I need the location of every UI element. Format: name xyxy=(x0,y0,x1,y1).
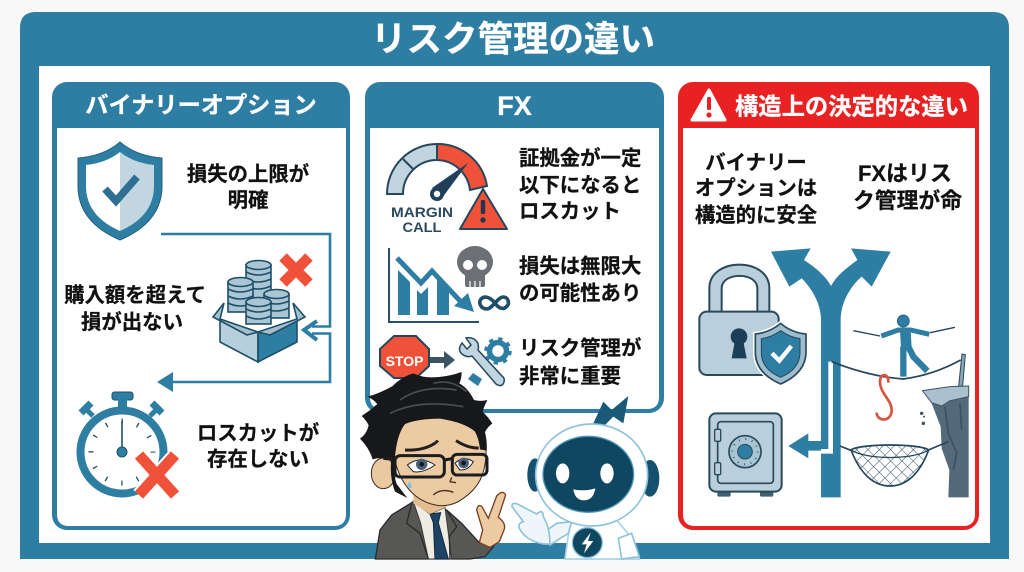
text: risk management important: 非常に重要 xyxy=(519,365,621,388)
text: margin stop-out xyxy=(519,146,641,223)
icon: falling chart xyxy=(389,248,479,322)
icon: stop sign: STOP xyxy=(386,353,423,369)
arrow: shield to box xyxy=(161,234,330,326)
visor xyxy=(543,436,634,512)
icon: cliff xyxy=(920,354,969,497)
panel body xyxy=(370,128,659,409)
text: risk management important xyxy=(519,336,641,388)
content area xyxy=(39,66,990,543)
icon: warning triangle xyxy=(692,90,725,120)
hair highlights xyxy=(390,382,467,413)
face xyxy=(392,415,486,506)
panel: FX xyxy=(365,82,664,413)
arrow: to safe xyxy=(788,433,821,458)
text: no loss above purchase amount xyxy=(64,284,206,334)
coin stack tall xyxy=(246,260,271,310)
panel frame xyxy=(365,82,664,413)
text: no loss above purchase amount: 購入額を超えて xyxy=(64,284,206,307)
icon: tightrope walker xyxy=(853,315,955,377)
panel frame xyxy=(52,82,350,530)
arrow: stop to tools xyxy=(430,351,455,369)
icon: safety net xyxy=(840,442,948,486)
arrow head: to stopwatch xyxy=(157,372,173,392)
text: clear loss limit: 損失の上限が xyxy=(187,162,309,186)
panel heading: 構造上の決定的な違い xyxy=(735,94,968,120)
text: binary is structurally safe: バイナリー xyxy=(705,152,807,174)
text: no loss above purchase amount: 損が出ない xyxy=(81,310,183,334)
illustration: forking paths and icons xyxy=(699,248,969,497)
panel: decisive difference xyxy=(678,82,979,530)
text: clear loss limit: 明確 xyxy=(228,189,268,212)
icon: gear xyxy=(486,339,510,363)
icon: margin call gauge xyxy=(387,144,507,235)
lapels xyxy=(407,503,457,559)
eyebrows xyxy=(405,441,479,450)
text: no stop-out exists: 存在しない xyxy=(207,448,309,471)
arm xyxy=(540,522,572,545)
eyes xyxy=(407,458,473,472)
text: margin stop-out: ロスカット xyxy=(519,201,621,223)
head xyxy=(536,424,648,526)
text: binary is structurally safe: 構造的に安全 xyxy=(695,204,818,227)
text: no stop-out exists: ロスカットが xyxy=(197,421,319,445)
earphones xyxy=(527,458,659,497)
panel body xyxy=(683,128,975,526)
text: FX risk management xyxy=(853,161,962,213)
glasses xyxy=(383,454,487,477)
body xyxy=(565,520,639,559)
icon: hook xyxy=(877,375,892,419)
icon: red cross xyxy=(283,257,309,283)
text: binary is structurally safe xyxy=(695,152,818,227)
panel heading: FX xyxy=(497,91,532,121)
chest badge xyxy=(572,528,602,558)
icon: wrench xyxy=(460,338,504,386)
text: risk management important: リスク管理が xyxy=(519,336,641,360)
text: unlimited loss xyxy=(519,255,641,305)
text: binary is structurally safe: オプションは xyxy=(695,177,817,200)
right arm xyxy=(618,533,639,559)
tightrope xyxy=(832,360,961,379)
panel frame xyxy=(678,82,979,530)
hair xyxy=(360,372,492,460)
nose and mouth xyxy=(433,477,456,495)
shirt xyxy=(413,502,452,559)
text: margin stop-out: 証拠金が一定 xyxy=(519,146,641,170)
icon: padlock xyxy=(699,265,779,375)
panel heading: バイナリーオプション xyxy=(85,92,317,118)
icon: shield with check xyxy=(78,142,162,240)
ear xyxy=(371,458,395,489)
text: FX risk management: FXはリス xyxy=(858,161,952,186)
coin stack front xyxy=(246,298,271,324)
character: robot assistant xyxy=(512,396,659,559)
text: clear loss limit xyxy=(187,162,309,212)
text: FX risk management: ク管理が命 xyxy=(853,188,962,213)
icon: coins in box xyxy=(213,260,305,362)
antenna lightning xyxy=(593,396,628,425)
arrow: forking path xyxy=(771,248,891,497)
neck xyxy=(413,493,457,514)
title: リスク管理の違い xyxy=(371,19,655,59)
icon: margin call gauge: CALL xyxy=(402,219,442,235)
text: unlimited loss: の可能性あり xyxy=(519,282,641,305)
arrow: box to stopwatch xyxy=(168,334,330,382)
icon: infinity xyxy=(480,297,508,309)
coin stack left xyxy=(228,278,253,312)
hand pointing xyxy=(512,503,550,544)
face xyxy=(556,463,614,500)
panel body xyxy=(57,128,346,526)
text: unlimited loss: 損失は無限大 xyxy=(519,255,641,278)
arrow head: into box xyxy=(304,321,317,340)
icon: stopwatch with cross xyxy=(80,392,175,495)
icon: skull xyxy=(457,246,493,287)
hand pointing up xyxy=(477,492,506,547)
text: margin stop-out: 以下になると xyxy=(519,174,641,197)
text: no stop-out exists xyxy=(197,421,319,471)
icon: safe xyxy=(709,413,782,497)
sweat drop xyxy=(408,482,412,488)
coin stack right xyxy=(264,290,289,318)
icon: stop sign xyxy=(380,336,429,378)
panel: binary options xyxy=(52,82,350,530)
icon: small shield xyxy=(755,323,806,384)
character: worried businessman xyxy=(360,372,506,559)
box xyxy=(220,319,258,362)
suit xyxy=(375,502,494,559)
tie xyxy=(430,513,448,559)
sideburn tuft xyxy=(391,459,407,498)
icon: margin call gauge: MARGIN xyxy=(391,204,453,220)
